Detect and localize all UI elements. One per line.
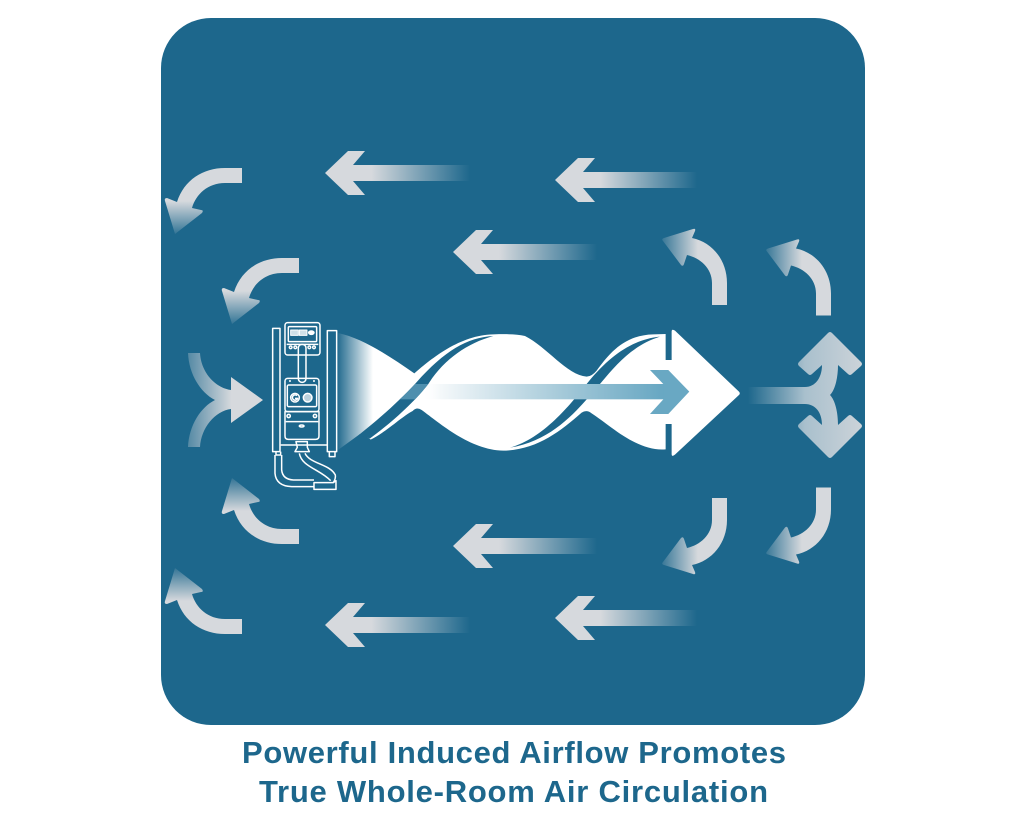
merging intake arrow: [188, 353, 263, 447]
dark twist ribbon left: [358, 336, 493, 438]
center arrow shaft: [422, 384, 665, 399]
curved arrow upper right outer: [766, 239, 831, 316]
airflow helix with arrow: [338, 330, 740, 456]
curved arrow lower right outer: [766, 488, 831, 564]
arrow shaft over left ribbon: [400, 384, 428, 400]
power plug and cord: [275, 442, 336, 489]
splitting exhaust arrow: [748, 332, 862, 458]
straight arrow lower middle: [453, 524, 597, 568]
curved arrow upper right inner: [662, 229, 727, 305]
curved arrow lower left inner: [222, 478, 299, 544]
icon: fan line drawing: [273, 323, 337, 489]
dark twist ribbon right: [510, 337, 660, 448]
straight arrow bottom row right: [555, 596, 697, 640]
fan motor box: [285, 378, 319, 412]
curved arrow upper left inner: [222, 258, 299, 324]
straight arrow top row right: [555, 158, 697, 202]
curved arrow lower right inner: [662, 498, 727, 574]
infographic: [161, 18, 865, 802]
panel: background: [161, 18, 865, 725]
fan lower housing: [281, 412, 327, 445]
center arrow head: [650, 370, 689, 414]
white twisted airflow: [338, 333, 666, 451]
caption line 1: Powerful Induced Airflow Promotes: [242, 735, 786, 770]
straight arrow bottom row left: [325, 603, 470, 647]
fan top control box: [285, 323, 320, 355]
straight arrow upper middle: [453, 230, 597, 274]
white large arrow head: [662, 330, 740, 456]
curved arrow upper left outer: [165, 168, 242, 234]
fan left rail: [273, 328, 281, 455]
curved arrow lower left outer: [165, 568, 242, 634]
fan right rail: [327, 331, 337, 457]
fan handle: [298, 344, 306, 382]
caption line 2: True Whole-Room Air Circulation: [259, 774, 768, 809]
straight arrow top row left: [325, 151, 470, 195]
caption: [242, 735, 786, 809]
